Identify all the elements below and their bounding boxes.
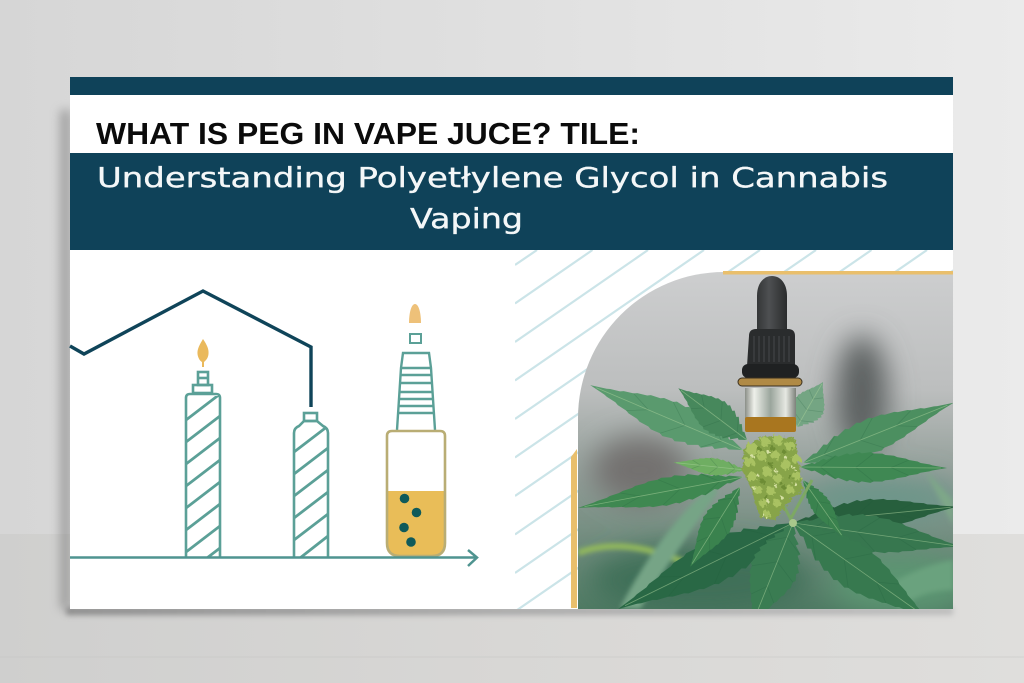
top dark bar	[70, 77, 953, 95]
gold accent lines	[571, 271, 953, 608]
chart: PEG line illustration	[70, 291, 477, 571]
cannabis bud	[742, 435, 803, 520]
arrow: baseline axis	[70, 550, 477, 566]
icon: striped cartridge two	[294, 413, 328, 558]
blurred background	[590, 335, 970, 616]
blurred out-of-focus leaves and stem	[578, 470, 953, 609]
leaf: upper leaf cluster	[578, 402, 953, 566]
diagonal stripes pattern	[515, 250, 953, 609]
subtitle band: Vaping	[410, 203, 523, 235]
dropper	[738, 276, 802, 432]
leaf: back leaves	[590, 382, 825, 450]
panel: infographic card	[69, 77, 953, 609]
card shadow	[60, 110, 953, 615]
subtitle band	[70, 153, 953, 250]
icon: flame	[197, 339, 209, 367]
icon: striped cartridge one	[186, 372, 220, 571]
photo: dropper over cannabis plant	[578, 272, 953, 609]
subtitle band: Understanding Polyetłylene Glycol in Cannabis	[97, 162, 888, 194]
icon: dropper bottle	[387, 304, 445, 556]
peak line	[70, 291, 311, 407]
title: WHAT IS PEG IN VAPE JUCE? TILE:	[96, 117, 640, 151]
leaf: lower leaf cluster	[618, 498, 953, 609]
